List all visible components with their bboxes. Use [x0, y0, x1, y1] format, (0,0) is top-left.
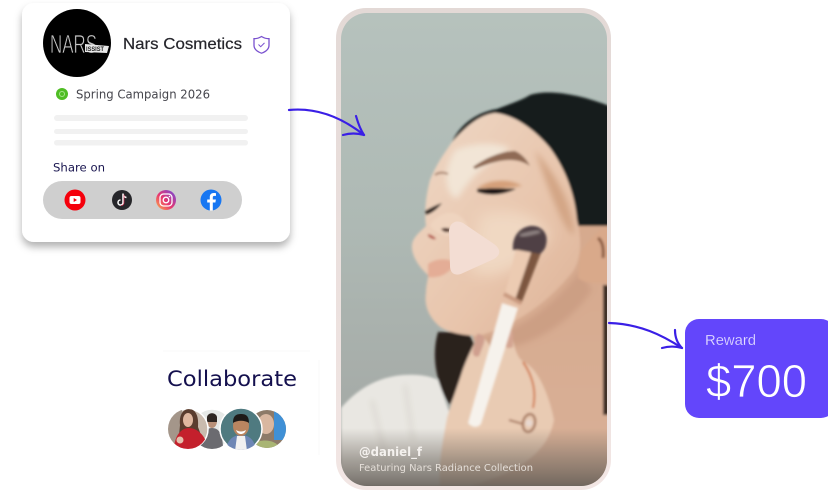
icon: Instagram	[156, 190, 176, 210]
icon: Facebook	[200, 190, 222, 210]
caption: Featuring Nars Radiance Collection	[359, 463, 533, 474]
right edge hair	[603, 285, 609, 415]
description placeholder lines	[54, 115, 248, 146]
icon: TikTok	[112, 190, 132, 210]
eyebrow	[473, 151, 530, 169]
avatar 1	[168, 409, 208, 450]
nose	[440, 216, 466, 235]
under-jaw shadow	[487, 278, 589, 345]
icon: YouTube	[64, 190, 86, 210]
brush	[468, 226, 547, 427]
temple shade	[535, 150, 574, 235]
arrow: video to reward	[609, 323, 682, 348]
eye lid	[477, 181, 522, 189]
reward label: Reward	[705, 332, 756, 349]
panel: video frame	[336, 8, 612, 490]
avatar 3	[220, 408, 262, 451]
ring	[521, 413, 537, 433]
ear	[579, 274, 584, 280]
avatar 2	[200, 410, 224, 449]
far eye	[425, 203, 442, 215]
hand	[440, 339, 554, 474]
arrow: card to video	[289, 110, 364, 135]
campaign photo	[341, 13, 612, 486]
finger gap	[523, 362, 534, 408]
forehead cream patch	[446, 144, 510, 198]
bottom gradient	[341, 428, 607, 486]
icon: play button	[449, 221, 499, 275]
creator handle: @daniel_f	[359, 444, 423, 460]
share on label: Share on	[53, 160, 105, 174]
collaborator avatars	[168, 408, 286, 451]
brand name: Nars Cosmetics	[123, 36, 242, 53]
panel: collaborate	[168, 370, 296, 450]
icon: Nars logo avatar: NARS	[50, 29, 97, 59]
cheek highlight	[470, 211, 550, 275]
icon: Nars logo avatar: ISSIST	[86, 47, 104, 53]
neck and chest	[470, 224, 607, 486]
face	[412, 113, 580, 336]
campaign status: Spring Campaign 2026	[76, 88, 210, 102]
avatar 4	[256, 410, 286, 448]
fingernails	[473, 334, 485, 357]
collaborate heading: Collaborate	[167, 367, 297, 391]
back hair	[435, 332, 476, 405]
shirt	[341, 375, 452, 486]
reward amount: $700	[706, 355, 807, 407]
panel: reward	[685, 319, 828, 418]
lips	[428, 234, 436, 239]
icon: verified shield	[254, 36, 269, 53]
social share pill	[43, 181, 242, 219]
panel: brand card	[22, 3, 290, 242]
hair top	[452, 92, 612, 226]
icon: Nars logo avatar	[43, 9, 111, 77]
